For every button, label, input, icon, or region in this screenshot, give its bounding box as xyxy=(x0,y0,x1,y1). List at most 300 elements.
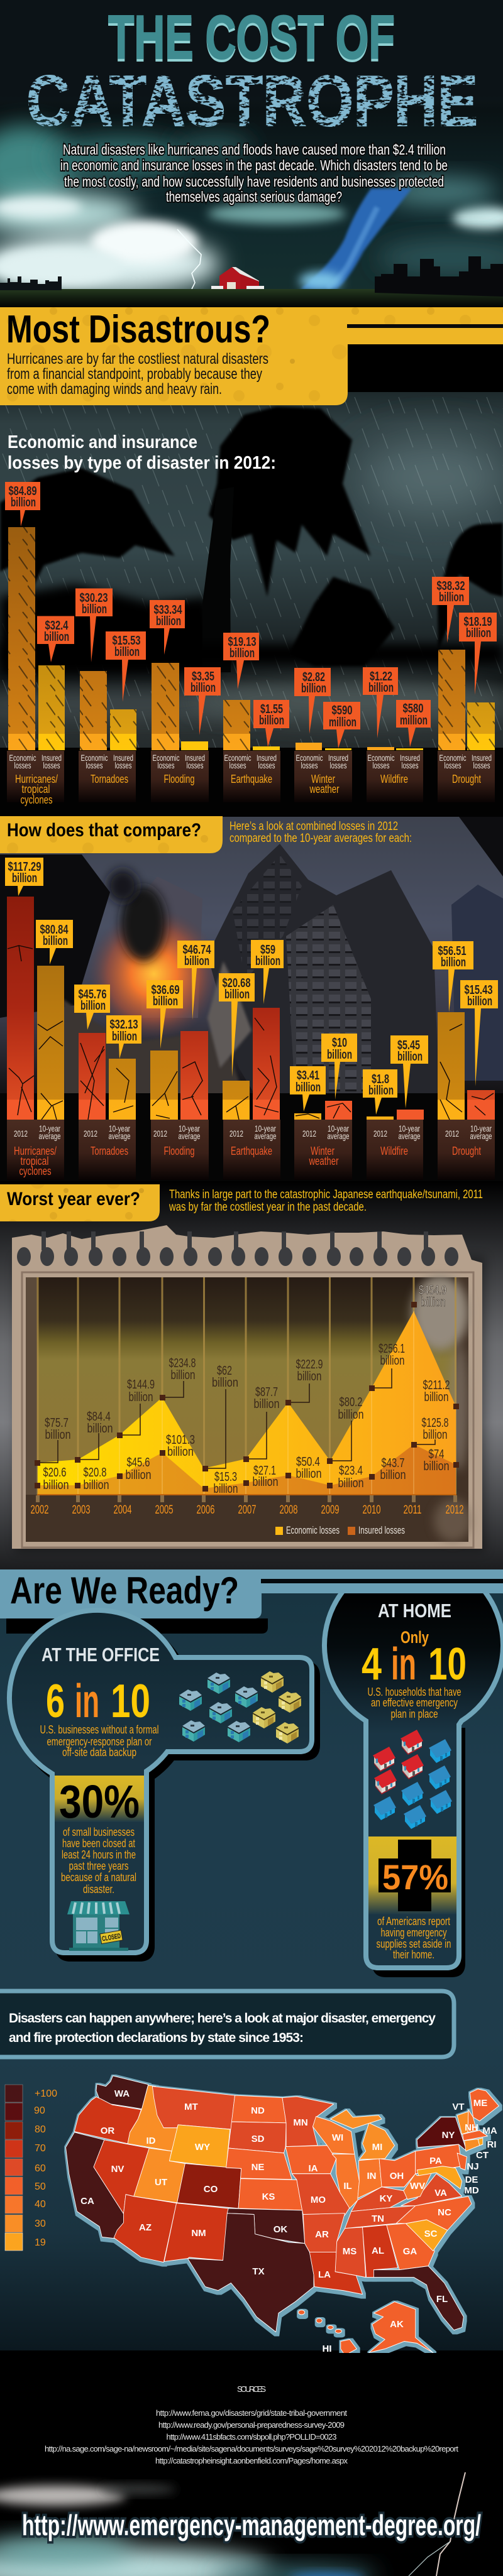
state labels: PA xyxy=(429,2156,442,2166)
data labels: billion xyxy=(424,1390,449,1404)
state labels: WI xyxy=(332,2132,343,2143)
state labels: OH xyxy=(390,2171,404,2181)
callout values: $59 xyxy=(260,943,275,957)
axis labels: 2012 xyxy=(302,1128,316,1138)
callout values: billion xyxy=(153,995,178,1008)
state labels: NE xyxy=(252,2162,264,2173)
data labels: $62 xyxy=(217,1364,232,1378)
stat: 6 in 10 xyxy=(46,1674,150,1727)
at the office heading: AT THE OFFICE xyxy=(41,1644,160,1666)
state labels: CA xyxy=(80,2196,94,2207)
category labels: cyclones xyxy=(19,1165,52,1177)
axis labels: Insured xyxy=(400,753,420,763)
data labels: $20.8 xyxy=(83,1466,107,1480)
stat description: plan in place xyxy=(391,1708,438,1720)
stat description: emergency-response plan or xyxy=(47,1735,152,1748)
description: come with damaging winds and heavy rain. xyxy=(7,381,222,398)
category labels: Hurricanes/ xyxy=(14,1145,57,1157)
stat description: U.S. businesses without a formal xyxy=(40,1723,158,1736)
header band: Worst year ever: Worst year ever? xyxy=(7,1189,140,1209)
year axis: 2005 xyxy=(155,1504,174,1517)
axis labels: 2012 xyxy=(445,1128,459,1138)
category labels: Drought xyxy=(452,773,481,785)
state labels: UT xyxy=(155,2177,167,2188)
map legend: 60 xyxy=(35,2163,46,2174)
description xyxy=(7,351,268,398)
callout values: billion xyxy=(156,614,181,628)
category labels: Winter xyxy=(311,1145,334,1157)
axis labels: 10-year xyxy=(470,1123,492,1133)
stat description: least 24 hours in the xyxy=(62,1848,136,1861)
axis labels: Economic xyxy=(296,753,323,763)
axis labels: 10-year xyxy=(399,1123,420,1133)
ground xyxy=(0,289,503,307)
callout values: billion xyxy=(184,954,209,968)
callout values: billion xyxy=(439,591,464,604)
year axis: 2010 xyxy=(362,1504,381,1517)
data labels: billion xyxy=(128,1390,153,1404)
header band: How does that compare xyxy=(0,816,223,853)
icon: closed shop xyxy=(67,1901,130,1951)
state labels: NJ xyxy=(467,2161,479,2172)
compare description: compared to the 10-year averages for each: xyxy=(229,832,412,845)
axis labels: Insured xyxy=(113,753,133,763)
icon: red barn xyxy=(211,267,264,289)
state labels: WV xyxy=(410,2181,425,2191)
axis labels: Economic xyxy=(9,753,36,763)
data labels: billion xyxy=(43,1478,69,1492)
header band: Worst year ever xyxy=(0,1184,160,1221)
data labels: billion xyxy=(212,1376,238,1390)
header band: Most Disastrous xyxy=(0,307,503,405)
axis labels: losses xyxy=(301,760,318,770)
callout values: billion xyxy=(296,1081,321,1094)
data labels: billion xyxy=(45,1428,70,1442)
title xyxy=(26,3,478,141)
callout values: billion xyxy=(43,934,68,948)
HI label on black: HI xyxy=(322,2344,332,2354)
icon: black cross xyxy=(379,1840,451,1911)
year axis: 2012 xyxy=(445,1504,464,1517)
stat: 6 in 10: 10 xyxy=(111,1674,150,1727)
category labels: Earthquake xyxy=(231,1145,272,1157)
axis labels: 10-year xyxy=(179,1123,200,1133)
callout values xyxy=(8,860,493,1098)
chart legend: Insured losses xyxy=(358,1524,405,1536)
callout values: billion xyxy=(44,630,69,644)
callout values: billion xyxy=(11,496,36,510)
bar chart: 2012 losses by disaster xyxy=(7,527,495,806)
state labels: CO xyxy=(204,2184,218,2195)
state labels: ME xyxy=(473,2098,487,2109)
year axis: 2002 xyxy=(30,1504,49,1517)
icon: houses xyxy=(373,1730,452,1829)
callout values: $84.89 xyxy=(9,484,36,498)
data labels: billion xyxy=(380,1468,406,1482)
year grid lines xyxy=(38,1277,455,1495)
data labels: billion xyxy=(167,1445,194,1459)
state labels: AR xyxy=(315,2229,329,2240)
callout values xyxy=(9,484,492,729)
category labels: Drought xyxy=(452,1145,481,1157)
panel: at the office shadow xyxy=(33,1641,320,1962)
callout values: $15.53 xyxy=(112,634,141,648)
state labels: TX xyxy=(252,2266,265,2277)
stat description: of Americans report xyxy=(377,1915,450,1928)
category labels xyxy=(15,773,481,806)
yellow band xyxy=(55,1776,144,1822)
stat description: because of a natural xyxy=(61,1871,136,1884)
callout values: $5.45 xyxy=(397,1039,420,1052)
icon: office buildings xyxy=(179,1671,301,1744)
state labels: MN xyxy=(293,2117,308,2128)
callout values: million xyxy=(400,714,428,728)
callout values: $36.69 xyxy=(151,983,180,997)
stat: 6 in 10: in xyxy=(75,1674,99,1727)
state labels: IL xyxy=(343,2181,352,2191)
stat description: off-site data backup xyxy=(62,1746,136,1759)
axis labels: Economic xyxy=(80,753,108,763)
data labels: billion xyxy=(253,1475,278,1489)
state labels: NC xyxy=(438,2207,451,2218)
blue section background xyxy=(0,1569,503,2350)
state labels: ND xyxy=(251,2105,265,2116)
callout values: $2.82 xyxy=(302,670,325,684)
axis labels: 10-year xyxy=(109,1123,130,1133)
stat description xyxy=(61,1826,136,1896)
category labels: cyclones xyxy=(20,794,53,806)
sources: SOURCES xyxy=(237,2384,266,2394)
data labels: billion xyxy=(423,1428,448,1442)
data labels: billion xyxy=(214,1482,238,1496)
callout values: $38.32 xyxy=(436,579,465,593)
callout values: billion xyxy=(114,645,140,659)
map legend: +100 xyxy=(35,2088,57,2099)
map legend: 50 xyxy=(35,2181,46,2192)
axis labels: Insured xyxy=(185,753,205,763)
category labels: Flooding xyxy=(163,773,195,785)
callout values: $1.55 xyxy=(260,702,283,716)
callout values: billion xyxy=(259,714,284,728)
data labels: $101.3 xyxy=(166,1433,195,1447)
stat description: having emergency xyxy=(381,1926,446,1939)
axis labels: 10-year xyxy=(39,1123,60,1133)
callout values: $80.84 xyxy=(40,923,69,937)
torn paper panel xyxy=(12,1225,485,1552)
state labels: MS xyxy=(343,2246,357,2257)
chart heading xyxy=(8,432,276,473)
stat description: their home. xyxy=(393,1948,434,1961)
data labels: $234.8 xyxy=(169,1356,196,1370)
stat description: disaster. xyxy=(83,1883,114,1896)
state labels: RI xyxy=(487,2139,497,2150)
map legend: 30 xyxy=(35,2219,46,2229)
state labels: WA xyxy=(114,2088,130,2099)
axis labels: average xyxy=(254,1131,277,1141)
callout values: billion xyxy=(441,956,466,969)
data labels: $144.9 xyxy=(127,1378,155,1392)
state labels: AK xyxy=(390,2319,404,2330)
axis labels: losses xyxy=(186,760,204,770)
callout values: $30.23 xyxy=(79,591,108,605)
axis labels: Insured xyxy=(328,753,348,763)
state labels: SD xyxy=(252,2134,265,2144)
state labels: GA xyxy=(403,2246,417,2257)
callout values: $15.43 xyxy=(464,983,493,997)
callout values: billion xyxy=(255,954,280,968)
callout values: $10 xyxy=(332,1036,347,1050)
data labels: $84.4 xyxy=(87,1410,111,1424)
axis labels: losses xyxy=(157,760,175,770)
header band: How does that compare: How does that compare? xyxy=(7,820,201,841)
year axis: 2004 xyxy=(113,1504,132,1517)
axis labels: losses xyxy=(43,760,60,770)
intro text: themselves against serious damage? xyxy=(166,188,342,205)
state labels: VT xyxy=(452,2102,465,2112)
callout values: billion xyxy=(368,681,394,695)
category labels: Hurricanes/ xyxy=(15,773,58,785)
axis labels: average xyxy=(327,1131,350,1141)
axis labels: Economic xyxy=(439,753,467,763)
compare description xyxy=(229,820,412,845)
category labels: Winter xyxy=(311,773,335,785)
data labels: $27.1 xyxy=(253,1464,276,1478)
state labels: FL xyxy=(436,2294,448,2305)
map: declarations by state xyxy=(66,2076,499,2355)
callout values: $590 xyxy=(332,704,352,718)
callout values: billion xyxy=(327,1048,352,1062)
category labels: Earthquake xyxy=(231,773,272,785)
category labels: weather xyxy=(309,1155,338,1167)
state labels: OK xyxy=(274,2224,287,2235)
callouts: 2012 loss values xyxy=(5,482,497,748)
axis labels: losses xyxy=(114,760,132,770)
axis labels: Economic xyxy=(224,753,252,763)
icon: closed shop: CLOSED xyxy=(101,1932,121,1943)
axis labels: 2012 xyxy=(153,1128,167,1138)
panel: at home shadow xyxy=(372,1728,465,1977)
stat description xyxy=(367,1686,462,1720)
category labels: Wildfire xyxy=(380,1145,408,1157)
callout values: billion xyxy=(191,681,216,695)
year axis: 2003 xyxy=(72,1504,91,1517)
callout values: billion xyxy=(80,999,106,1013)
axis labels: average xyxy=(179,1131,201,1141)
hero storm background xyxy=(0,0,503,307)
leader lines and markers xyxy=(35,1302,459,1492)
axis labels: losses xyxy=(372,760,390,770)
heading: Most Disastrous? xyxy=(6,308,270,351)
data labels: $45.6 xyxy=(127,1456,150,1470)
axis labels: losses xyxy=(444,760,462,770)
data labels: $454.9 xyxy=(419,1284,446,1297)
axis labels: losses xyxy=(329,760,347,770)
panel: declarations heading box: and fire protection declarations by state since 1953: xyxy=(9,2031,304,2045)
worst year description xyxy=(169,1188,483,1214)
axis labels: Economic xyxy=(152,753,180,763)
data labels: billion xyxy=(338,1476,363,1490)
callout values: $32.4 xyxy=(45,619,69,633)
data labels: $87.7 xyxy=(255,1385,278,1399)
axis labels: 10-year xyxy=(255,1123,276,1133)
state labels: MD xyxy=(464,2185,479,2196)
stat: 30 percent: 30% xyxy=(59,1776,140,1828)
grid lines over areas xyxy=(78,1311,414,1495)
data labels: $43.7 xyxy=(381,1456,405,1470)
callout values: billion xyxy=(397,1050,423,1064)
callout values: $46.74 xyxy=(182,943,211,957)
callout values: $3.41 xyxy=(297,1069,319,1083)
axis labels: Insured xyxy=(257,753,277,763)
city skyline left xyxy=(0,276,62,290)
data labels: billion xyxy=(254,1397,279,1411)
state labels: MI xyxy=(372,2142,382,2153)
panel: declarations heading box: Disasters can happen anywhere; here’s a look at major disaster, emergency xyxy=(9,2011,436,2026)
callout values: $32.13 xyxy=(109,1018,138,1032)
storm background with palms xyxy=(0,390,503,817)
data labels: $20.6 xyxy=(43,1466,67,1480)
callout values: $33.34 xyxy=(153,603,182,617)
panel: at home xyxy=(324,1556,503,1968)
callout values: billion xyxy=(12,871,37,885)
category labels: Tornadoes xyxy=(91,773,128,785)
axis labels: losses xyxy=(401,760,419,770)
stat description: supplies set aside in xyxy=(376,1938,451,1950)
stat description: an effective emergency xyxy=(371,1696,458,1709)
axis labels: Insured xyxy=(472,753,492,763)
icon: tornado funnel xyxy=(299,188,412,290)
state labels: MT xyxy=(184,2102,198,2112)
stat: 57 percent: 57% xyxy=(382,1857,448,1897)
data labels: billion xyxy=(87,1422,113,1436)
data labels: $50.4 xyxy=(296,1455,320,1469)
state labels: IN xyxy=(367,2171,376,2181)
callout values: billion xyxy=(224,988,250,1001)
state labels: VA xyxy=(434,2188,447,2198)
grey gradient background xyxy=(0,1181,503,1571)
map legend xyxy=(5,2085,57,2251)
icon: lightning bolt xyxy=(177,229,201,289)
axis labels: losses xyxy=(14,760,31,770)
callout values: billion xyxy=(112,1030,137,1044)
data labels: $125.8 xyxy=(421,1416,449,1430)
callout values: $19.13 xyxy=(228,635,257,649)
footer storm clouds xyxy=(0,2353,503,2576)
bar chart: 2012 vs 10-year average xyxy=(7,897,495,1180)
area chart: insured losses xyxy=(38,1444,456,1495)
callout values: $20.68 xyxy=(223,976,250,990)
axis labels: average xyxy=(399,1131,421,1141)
data labels: $74 xyxy=(429,1448,444,1461)
axis labels: 2012 xyxy=(84,1128,97,1138)
callout values: $56.51 xyxy=(438,944,467,958)
map legend: 90 xyxy=(34,2105,45,2116)
year axis: 2006 xyxy=(196,1504,215,1517)
state labels: WY xyxy=(195,2142,210,2153)
state labels: HI xyxy=(322,2344,332,2354)
state labels: SC xyxy=(424,2229,438,2239)
compare description: Here’s a look at combined losses in 2012 xyxy=(229,820,398,833)
sources: http://www.411sbfacts.com/sbpoll.php?POLLID=0023 xyxy=(166,2432,337,2442)
sources: http://www.fema.gov/disasters/grid/state-tribal-government xyxy=(156,2408,347,2418)
state labels: MO xyxy=(311,2195,326,2205)
sources: http://na.sage.com/sage-na/newsroom/~/media/site/sagena/documents/surveys/sage%20survey%202012%20backup%20report xyxy=(45,2444,458,2453)
map legend: 40 xyxy=(35,2199,46,2210)
chart legend: Economic losses xyxy=(286,1524,340,1536)
yellow band xyxy=(368,1836,456,1914)
callout values: billion xyxy=(368,1084,394,1098)
stat description: U.S. households that have xyxy=(367,1686,462,1698)
data labels: billion xyxy=(83,1478,109,1492)
state labels: NM xyxy=(191,2228,206,2239)
stat: 4 in 10: in xyxy=(391,1639,416,1689)
data labels: $256.1 xyxy=(379,1342,405,1356)
description: Hurricanes are by far the costliest natural disasters xyxy=(7,351,268,368)
callout values: $580 xyxy=(402,702,424,716)
callout values: $1.8 xyxy=(372,1072,389,1086)
year axis: 2007 xyxy=(238,1504,257,1517)
map legend: 19 xyxy=(35,2237,46,2248)
category labels: tropical xyxy=(21,783,50,795)
data labels: $80.2 xyxy=(340,1395,362,1409)
data labels: $211.2 xyxy=(423,1378,450,1392)
state labels: NV xyxy=(111,2164,124,2175)
axis labels: losses xyxy=(229,760,246,770)
data labels: billion xyxy=(126,1468,151,1482)
year axis xyxy=(30,1495,464,1517)
chart heading: Economic and insurance xyxy=(8,432,197,452)
stat description xyxy=(40,1723,158,1759)
callout values: $18.19 xyxy=(464,615,492,629)
axis labels: average xyxy=(470,1131,492,1141)
callout values: $117.29 xyxy=(8,860,41,874)
stat description xyxy=(376,1915,451,1961)
data labels: billion xyxy=(338,1408,363,1422)
data labels xyxy=(43,1284,450,1496)
stat: 4 in 10: 10 xyxy=(428,1639,467,1689)
header band: Are We Ready: Are We Ready? xyxy=(10,1569,239,1612)
axis labels: losses xyxy=(258,760,275,770)
panel: declarations heading box xyxy=(0,1991,454,2057)
only label: Only xyxy=(401,1628,429,1647)
axis labels: 2012 xyxy=(229,1128,243,1138)
data labels: billion xyxy=(421,1296,445,1309)
axis labels: Insured xyxy=(41,753,62,763)
axis labels: 2012 xyxy=(373,1128,387,1138)
axis labels: losses xyxy=(473,760,490,770)
data labels: billion xyxy=(296,1467,322,1481)
panel: at the office xyxy=(9,1610,312,1953)
chart legend xyxy=(275,1524,405,1536)
callout values: $45.76 xyxy=(78,988,107,1001)
callout values: billion xyxy=(82,603,107,616)
callouts: comparison values xyxy=(5,858,498,1115)
state labels: AZ xyxy=(139,2222,152,2233)
sources: http://catastropheinsight.aonbenfield.com/Pages/home.aspx xyxy=(155,2456,348,2465)
category labels: Flooding xyxy=(163,1145,195,1157)
chart heading: losses by type of disaster in 2012: xyxy=(8,453,276,473)
worst year description: was by far the costliest year in the past decade. xyxy=(169,1201,367,1214)
stat: 4 in 10: 4 xyxy=(362,1639,382,1689)
state labels: NH xyxy=(465,2122,478,2133)
category labels: weather xyxy=(309,783,340,795)
intro text xyxy=(60,141,448,205)
data labels: billion xyxy=(424,1460,449,1473)
year axis: 2008 xyxy=(279,1504,298,1517)
stat description: past three years xyxy=(69,1860,128,1872)
state labels xyxy=(80,2088,497,2354)
data labels: billion xyxy=(380,1354,405,1368)
